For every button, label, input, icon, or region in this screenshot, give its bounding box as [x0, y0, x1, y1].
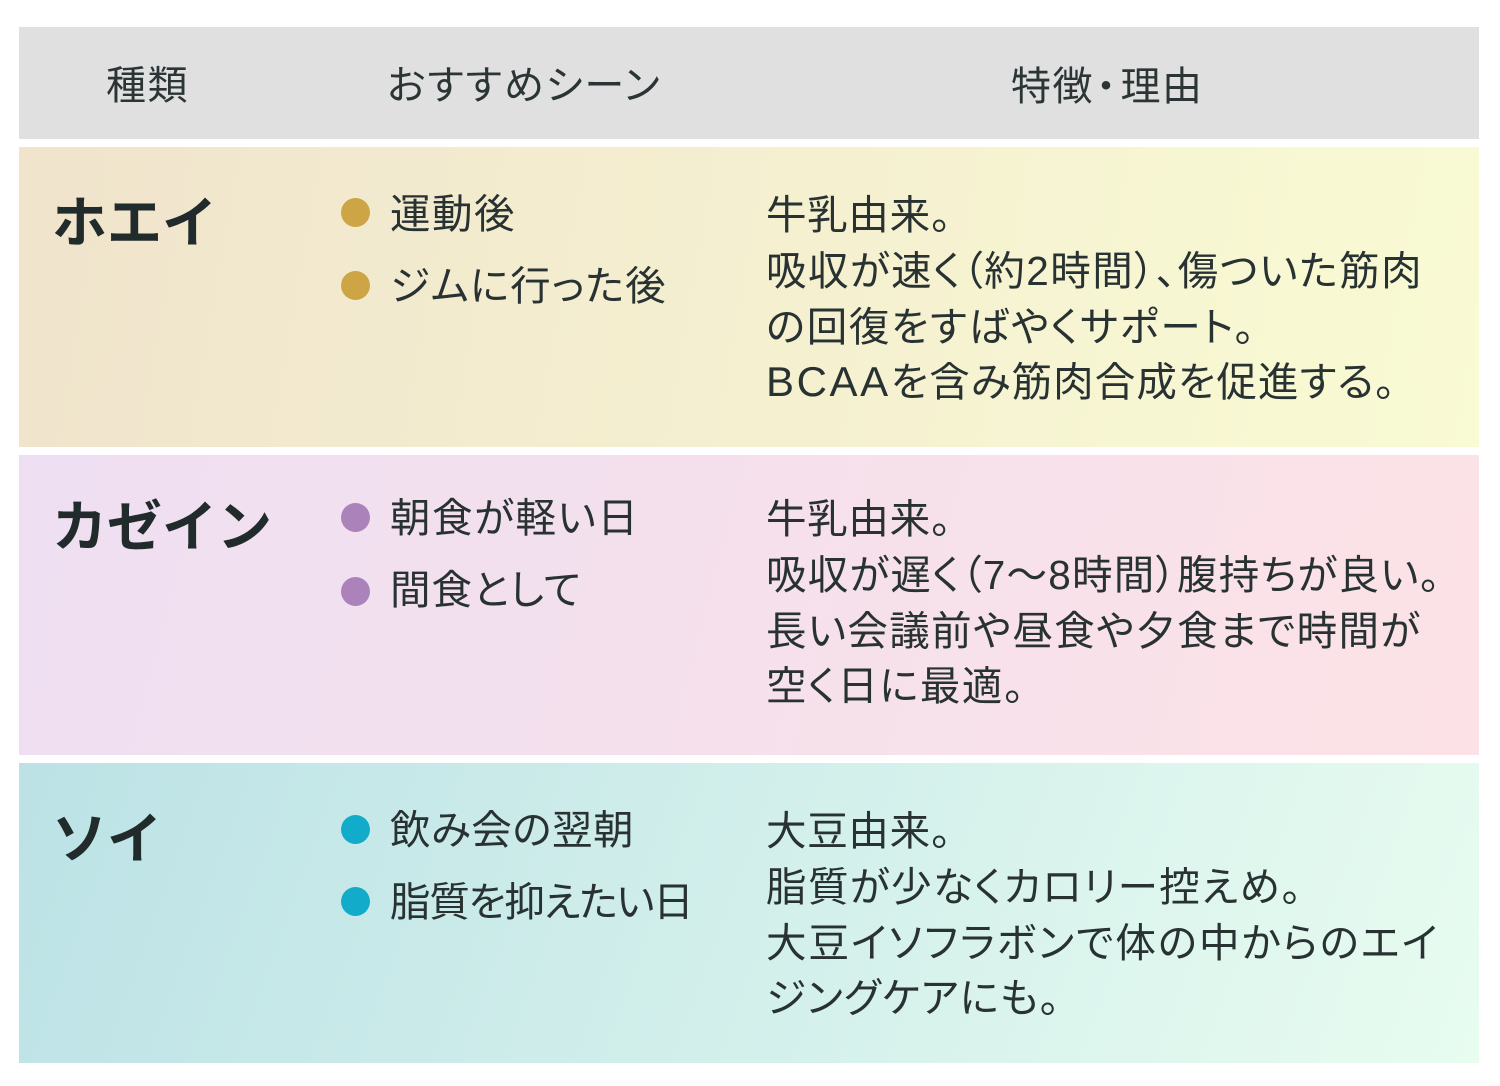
description: soy [766, 808, 1439, 1021]
bullet list: soy scenes: 脂質を抑えたい日 [390, 879, 693, 925]
header: type: 種類 [106, 64, 189, 108]
panel: soy [19, 763, 1479, 1063]
name: soy: ソイ [52, 808, 162, 870]
bullet list: soy scenes: 飲み会の翌朝 [390, 807, 634, 853]
description: casein: 牛乳由来。 [766, 496, 952, 542]
description: soy: 脂質が少なくカロリー控えめ。 [766, 864, 1303, 910]
header: features and reasons: 特徴・理由 [1011, 65, 1204, 109]
description: casein: 長い会議前や昼食や夕食まで時間が [766, 608, 1421, 654]
bullet list: whey scenes [341, 191, 667, 309]
description: casein [766, 496, 1441, 709]
description: casein: 空く日に最適。 [766, 663, 1026, 709]
description: whey: 吸収が速く（約2時間）、傷ついた筋肉 [766, 248, 1423, 294]
description: whey: の回復をすばやくサポート。 [766, 304, 1256, 350]
bullet list: soy scenes [341, 807, 693, 925]
table header [19, 27, 1479, 139]
description: whey: BCAAを含み筋肉合成を促進する。 [766, 358, 1396, 405]
panel: whey [19, 147, 1479, 447]
description: whey [766, 192, 1423, 405]
bullet list: casein scenes: 朝食が軽い日 [390, 495, 639, 541]
name: whey: ホエイ [52, 192, 217, 254]
bullet list: casein scenes: 間食として [390, 567, 582, 613]
header: recommended scenes: おすすめシーン [387, 64, 662, 108]
description: soy: 大豆イソフラボンで体の中からのエイ [766, 920, 1439, 966]
description: whey: 牛乳由来。 [766, 192, 952, 238]
panel: casein [19, 455, 1479, 755]
description: soy: 大豆由来。 [766, 808, 952, 854]
description: casein: 吸収が遅く（7〜8時間）腹持ちが良い。 [766, 552, 1441, 598]
description: soy: ジングケアにも。 [766, 975, 1061, 1021]
name: casein: カゼイン [52, 496, 272, 558]
bullet list: whey scenes: 運動後 [390, 191, 516, 237]
bullet list: casein scenes [341, 495, 639, 613]
bullet list: whey scenes: ジムに行った後 [390, 263, 667, 309]
